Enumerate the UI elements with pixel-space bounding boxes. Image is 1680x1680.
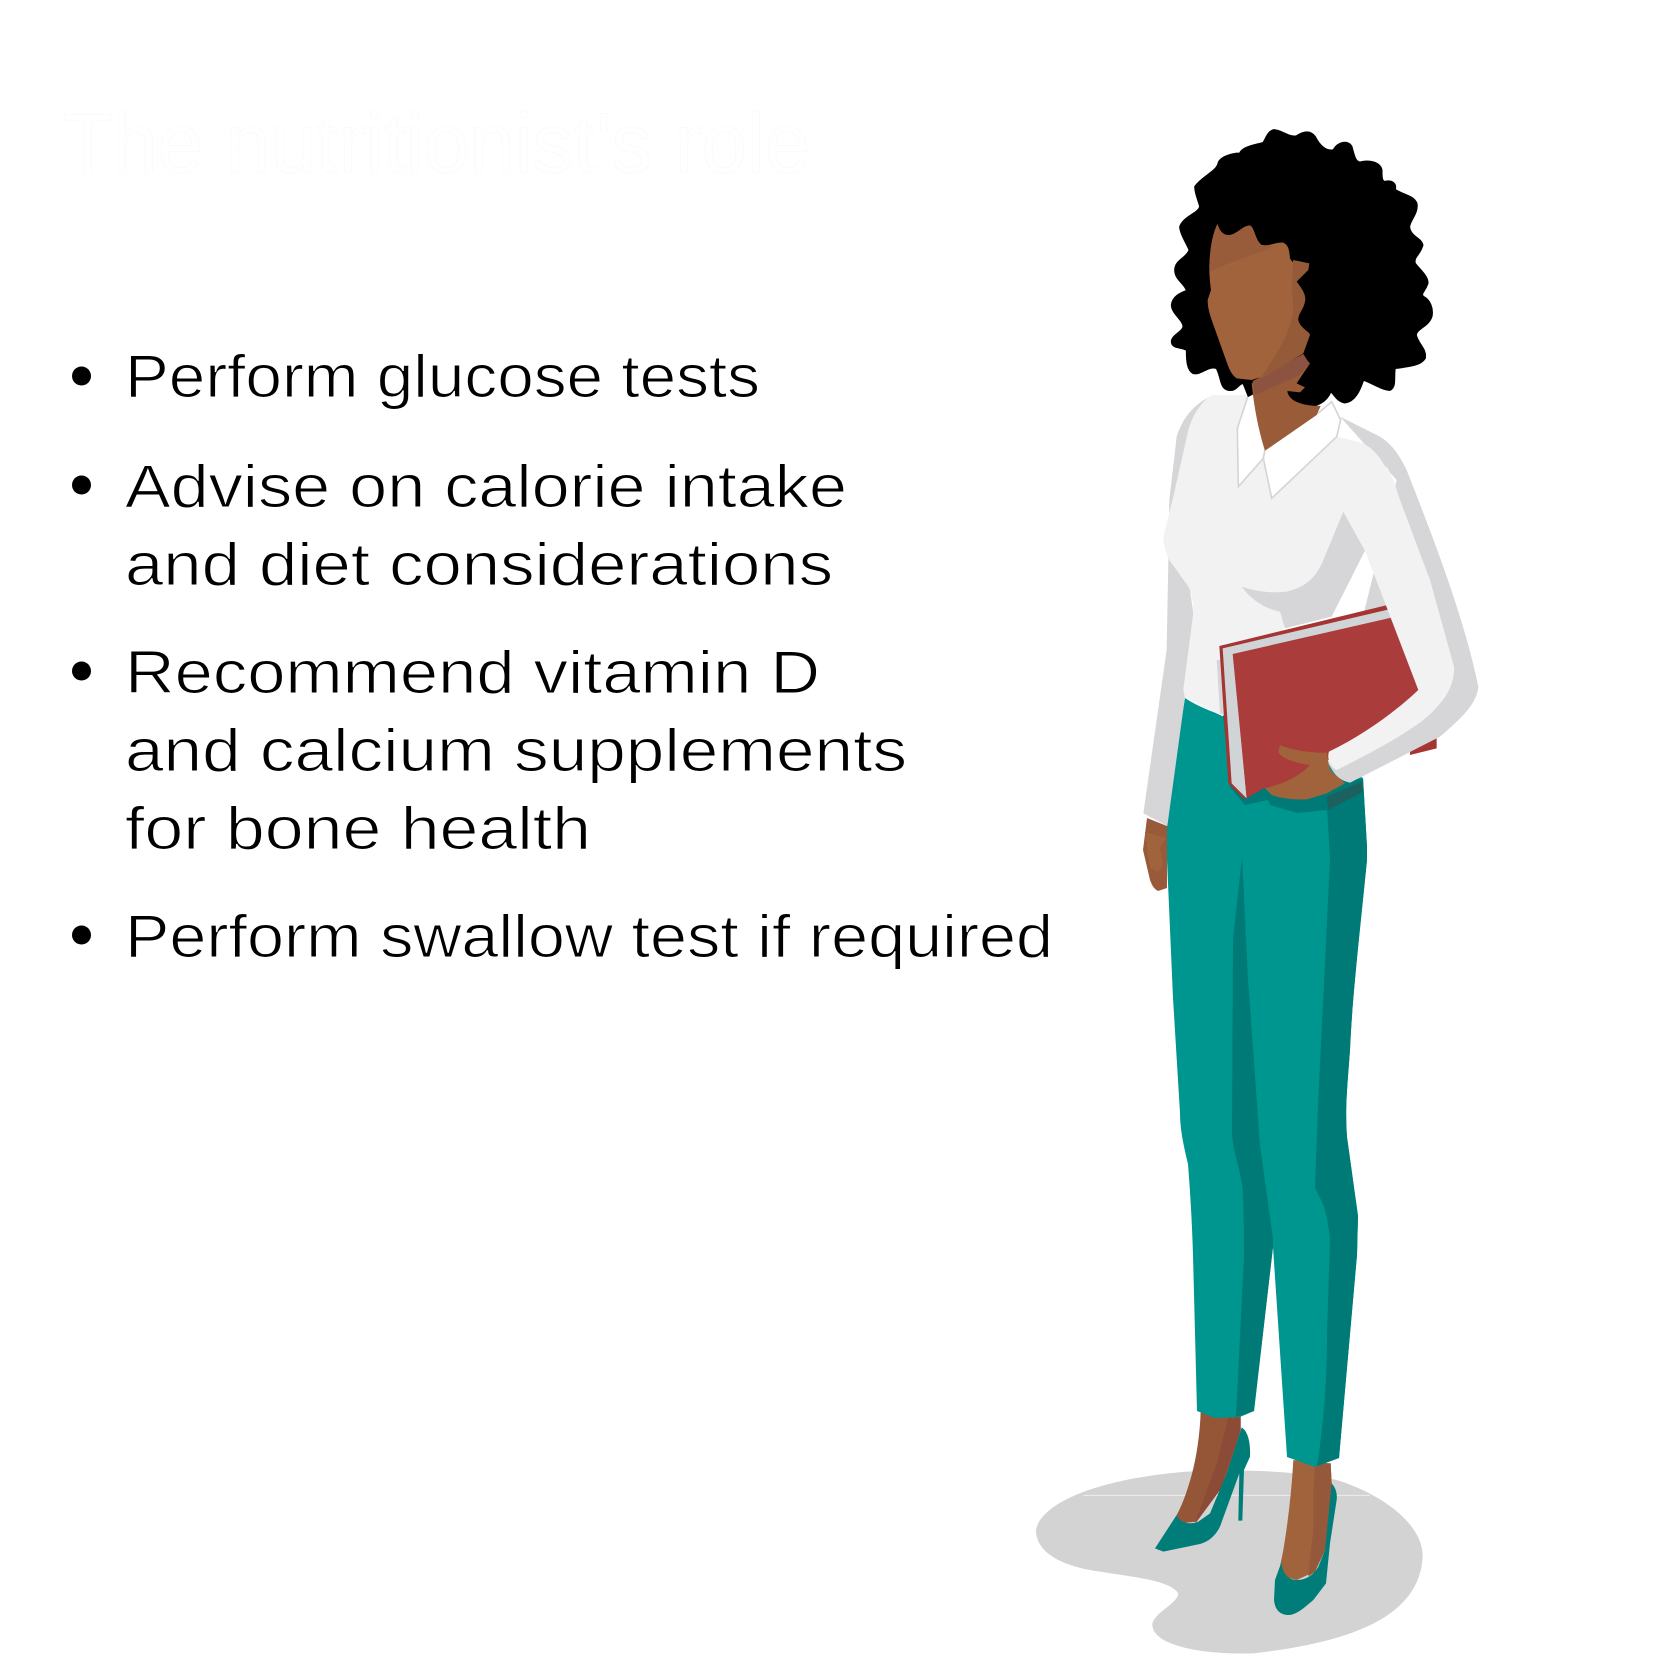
title: The nutritionist's role bbox=[63, 96, 810, 190]
bullet: supplements bbox=[72, 639, 907, 862]
bullet list bbox=[72, 343, 1053, 970]
book back cover bbox=[1219, 604, 1437, 799]
hair bbox=[1172, 130, 1432, 407]
torso bbox=[1163, 395, 1393, 715]
floor shadow bbox=[1036, 1470, 1423, 1654]
sleeve shadow bbox=[1328, 667, 1478, 783]
bullet: calorie intake bbox=[72, 453, 847, 598]
bullet: supplements: for bone health bbox=[125, 795, 591, 862]
bullet: supplements: Recommend vitamin D bbox=[125, 639, 820, 706]
back of face bbox=[1257, 260, 1310, 378]
bullet: glucose tests: Perform glucose tests bbox=[125, 343, 760, 410]
legs and shoes bbox=[1155, 1412, 1337, 1615]
bullet: swallow test: Perform swallow test if required bbox=[125, 903, 1053, 970]
face bbox=[1208, 224, 1293, 380]
neck bbox=[1252, 357, 1321, 451]
head bbox=[1172, 130, 1432, 451]
shirt bbox=[1143, 393, 1478, 826]
book and arm bbox=[1217, 467, 1478, 810]
bullet: supplements: and calcium supplements bbox=[125, 717, 907, 784]
hand shadow bbox=[1327, 782, 1363, 810]
neck shadow bbox=[1253, 354, 1309, 395]
hand bbox=[1265, 745, 1345, 799]
figure: nutritionist bbox=[1036, 130, 1478, 1654]
torso shade bbox=[1242, 512, 1365, 628]
right sleeve shadow bbox=[1328, 417, 1478, 783]
left sleeve shadow bbox=[1143, 395, 1215, 826]
book cover bbox=[1233, 616, 1424, 798]
forehead shadow bbox=[1209, 224, 1273, 272]
waist shadow bbox=[1223, 715, 1363, 813]
sleeve bbox=[1328, 467, 1454, 770]
trousers bbox=[1167, 698, 1367, 1467]
bullet: calorie intake: and diet considerations bbox=[125, 531, 833, 598]
book pages bbox=[1223, 608, 1398, 798]
bullet: calorie intake: Advise on calorie intake bbox=[125, 453, 847, 520]
book shadow bbox=[1217, 660, 1224, 715]
collar bbox=[1237, 393, 1341, 498]
left hand bbox=[1143, 818, 1167, 891]
